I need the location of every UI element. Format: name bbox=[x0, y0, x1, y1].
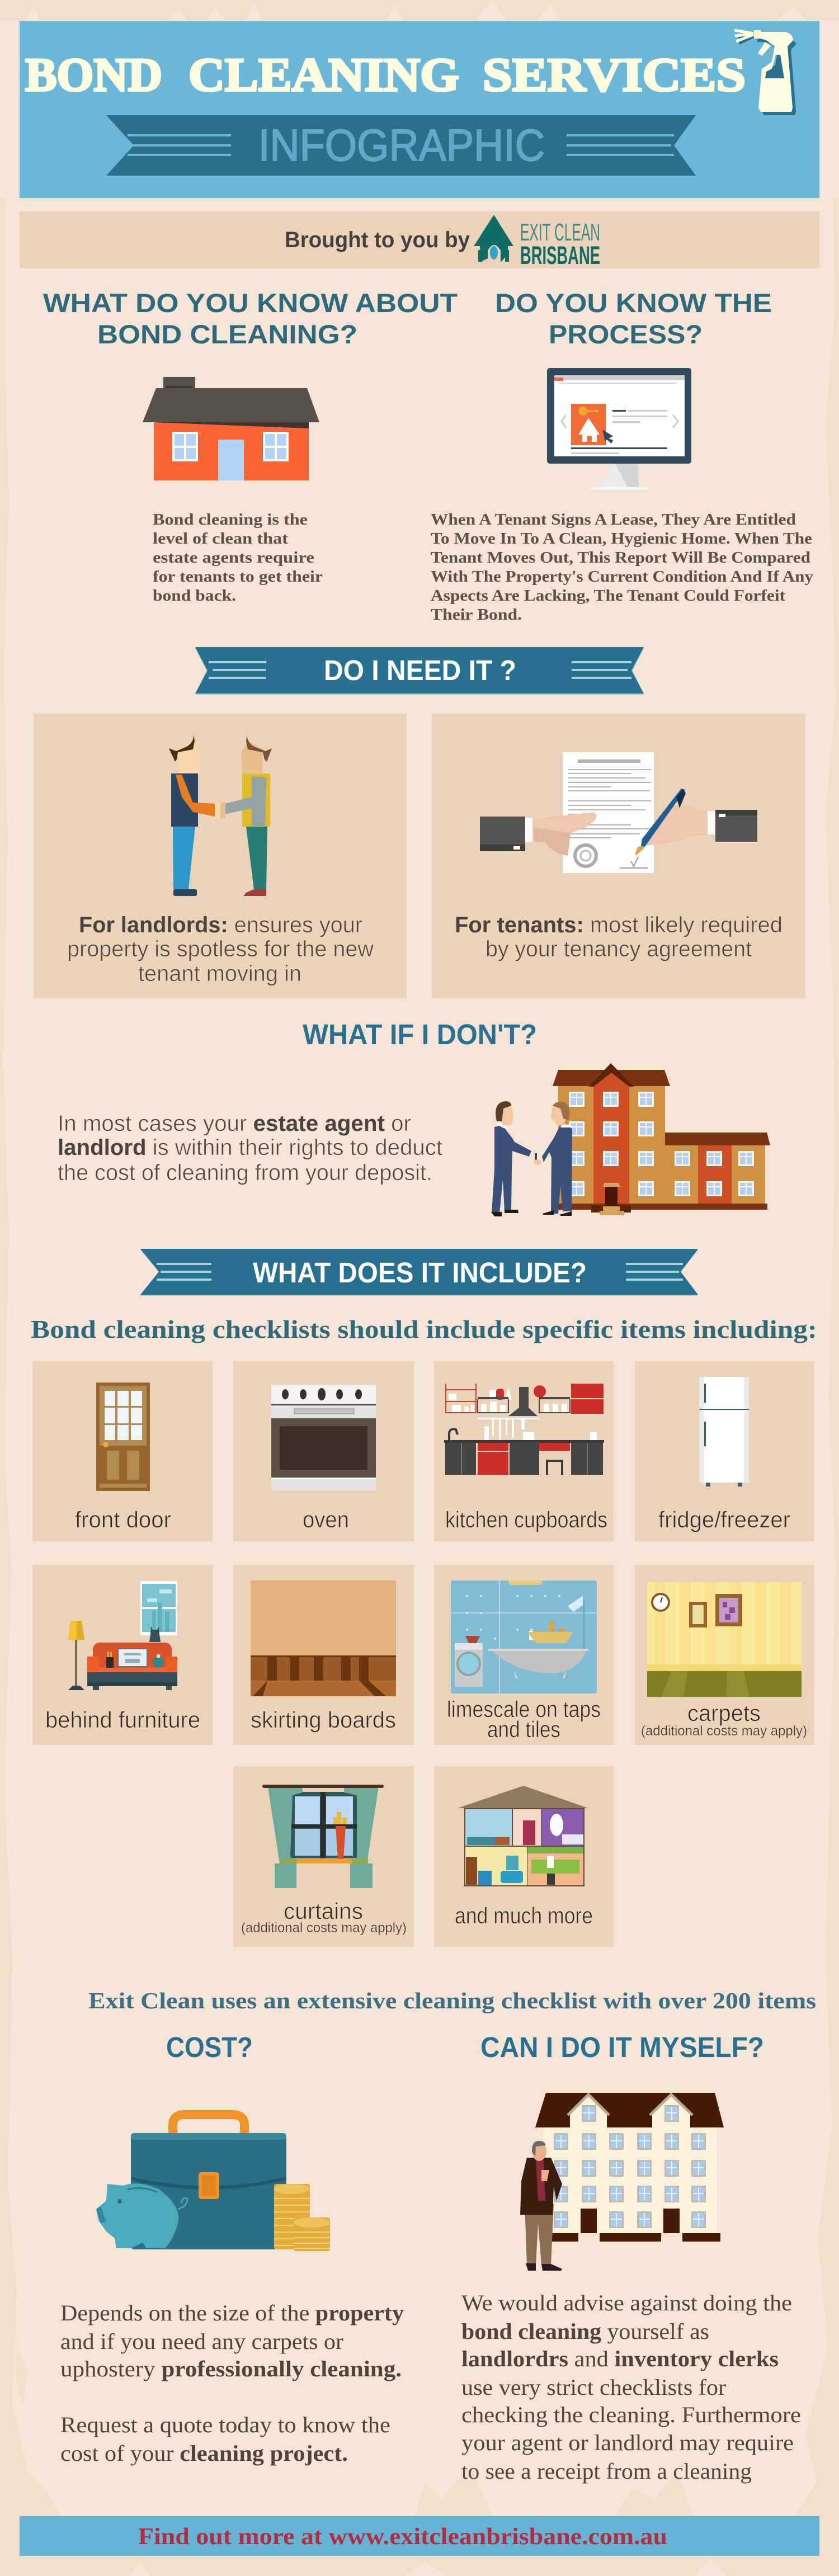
label: carpets: carpets bbox=[687, 1700, 761, 1726]
text: what if i don't body: In most cases your estate agent or bbox=[58, 1111, 411, 1136]
card: behind furniture bbox=[32, 1565, 213, 1745]
text: exit clean checklist note: Exit Clean uses an extensive cleaning checklist with over 200 items bbox=[88, 1988, 816, 2013]
ribbon: what does it include bbox=[140, 1249, 698, 1296]
text: can i do it myself description: checking the cleaning. Furthermore bbox=[461, 2402, 801, 2427]
text: bond cleaning definition: estate agents require bbox=[153, 549, 314, 567]
icon: window with curtains bbox=[262, 1785, 384, 1888]
text: what if i don't body: the cost of cleaning from your deposit. bbox=[58, 1160, 432, 1185]
text: can i do it myself description: use very strict checklists for bbox=[461, 2375, 726, 2400]
card: limescale bbox=[434, 1565, 614, 1745]
icon: exit clean brisbane logo: BRISBANE bbox=[520, 241, 600, 270]
text: process description: To Move In To A Clean, Hygienic Home. When The bbox=[431, 530, 812, 548]
text: process description: Aspects Are Lacking, The Tenant Could Forfeit bbox=[431, 587, 785, 605]
text: for landlords bbox=[67, 913, 374, 986]
panel: for landlords bbox=[34, 714, 407, 998]
heading: cost: COST? bbox=[166, 2031, 253, 2063]
icon: apartment building with two agents bbox=[491, 1063, 770, 1216]
title: bond cleaning services: SERVICES bbox=[483, 49, 746, 101]
text: process description bbox=[431, 511, 814, 624]
icon: house cross-section bbox=[458, 1786, 588, 1886]
label: kitchen cupboards: kitchen cupboards bbox=[445, 1507, 607, 1532]
text: bond cleaning definition: bond back. bbox=[153, 587, 236, 605]
label: fridge/freezer: fridge/freezer bbox=[658, 1507, 790, 1532]
heading: do you know the process bbox=[495, 288, 772, 349]
label: behind furniture: behind furniture bbox=[45, 1707, 200, 1733]
title: bond cleaning services: CLEANING bbox=[188, 49, 459, 101]
label: skirting boards: skirting boards bbox=[251, 1707, 396, 1733]
panel: do you know the process bbox=[431, 288, 814, 624]
card: kitchen cupboards bbox=[434, 1361, 614, 1541]
ribbon: infographic: INFOGRAPHIC bbox=[258, 120, 545, 170]
text: cost description: Request a quote today to know the bbox=[60, 2412, 390, 2437]
label: and much more: and much more bbox=[455, 1903, 593, 1928]
icon: two people shaking hands bbox=[169, 730, 272, 896]
card: and much more bbox=[434, 1766, 614, 1947]
icon: man in front of building bbox=[520, 2093, 724, 2271]
text: cost description: and if you need any carpets or bbox=[60, 2329, 343, 2354]
text: can i do it myself description: landlordrs and inventory clerks bbox=[461, 2346, 779, 2371]
text: for tenants: For tenants: most likely required bbox=[455, 913, 783, 937]
ribbon: what does it include: WHAT DOES IT INCLUDE? bbox=[253, 1257, 587, 1289]
label: curtains bbox=[241, 1898, 407, 1936]
text: for tenants bbox=[455, 913, 783, 961]
sponsor text: Brought to you by bbox=[285, 228, 470, 252]
brought-to-you-by band bbox=[20, 211, 819, 270]
label: curtains: (additional costs may apply) bbox=[241, 1920, 407, 1936]
panel: what do you know bbox=[43, 288, 458, 605]
card: oven bbox=[233, 1361, 414, 1541]
heading: what do you know about bond cleaning bbox=[43, 288, 458, 349]
icon: signing contract bbox=[480, 752, 757, 873]
card: carpets bbox=[635, 1565, 814, 1745]
text: can i do it myself description: to see a receipt from a cleaning bbox=[461, 2459, 752, 2484]
panel: can i do it myself bbox=[461, 2031, 801, 2484]
card: skirting boards bbox=[233, 1565, 414, 1745]
icon: briefcase, piggy bank and coins bbox=[96, 2115, 330, 2251]
text: can i do it myself description bbox=[461, 2290, 801, 2484]
label: limescale on taps and tiles bbox=[447, 1696, 601, 1742]
icon: wall and skirting board bbox=[251, 1580, 396, 1696]
icon: spray bottle bbox=[734, 30, 796, 115]
heading: what if i don't: WHAT IF I DON'T? bbox=[303, 1018, 537, 1050]
text: bond cleaning definition: level of clean that bbox=[153, 530, 288, 548]
text: what if i don't body bbox=[58, 1111, 442, 1185]
icon: exit clean brisbane logo bbox=[474, 215, 600, 270]
label: oven: oven bbox=[303, 1507, 349, 1532]
ribbon: infographic bbox=[106, 115, 696, 176]
footer band bbox=[20, 2516, 819, 2556]
text: what if i don't body: landlord is within their rights to deduct bbox=[58, 1135, 442, 1160]
text: bond cleaning definition: Bond cleaning is the bbox=[153, 511, 308, 529]
icon: fridge bbox=[699, 1377, 749, 1487]
heading: do you know the process: PROCESS? bbox=[549, 319, 703, 349]
icon: kitchen bbox=[444, 1384, 604, 1475]
heading: do you know the process: DO YOU KNOW THE bbox=[495, 288, 772, 318]
text: cost description: cost of your cleaning project. bbox=[60, 2441, 348, 2466]
text: can i do it myself description: bond cleaning yourself as bbox=[461, 2319, 709, 2344]
label: front door: front door bbox=[75, 1507, 171, 1532]
text: for landlords: property is spotless for the new bbox=[67, 937, 374, 961]
icon: oven bbox=[271, 1385, 376, 1490]
text: process description: Their Bond. bbox=[431, 606, 522, 624]
heading: checklist intro: Bond cleaning checklists should include specific items including: bbox=[31, 1315, 817, 1343]
heading: can i do it myself: CAN I DO IT MYSELF? bbox=[480, 2031, 764, 2063]
text: bond cleaning definition: for tenants to get their bbox=[153, 568, 323, 586]
ribbon: do i need it bbox=[195, 647, 644, 695]
text: process description: With The Property's Current Condition And If Any bbox=[431, 568, 814, 586]
header banner bbox=[18, 20, 821, 199]
text: cost description: uphostery professionally cleaning. bbox=[60, 2356, 402, 2381]
label: carpets: (additional costs may apply) bbox=[641, 1723, 807, 1739]
icon: red house bbox=[143, 377, 319, 480]
icon: room with carpet bbox=[647, 1582, 802, 1697]
icon: bathroom bbox=[451, 1580, 597, 1693]
text: can i do it myself description: We would advise against doing the bbox=[461, 2290, 792, 2315]
text: for landlords: tenant moving in bbox=[138, 961, 301, 986]
title: bond cleaning services: BOND bbox=[25, 49, 162, 101]
label: limescale on taps and tiles: and tiles bbox=[487, 1716, 560, 1742]
text: cost description bbox=[60, 2300, 404, 2466]
label: curtains: curtains bbox=[284, 1898, 363, 1924]
panel: for tenants bbox=[432, 714, 805, 998]
text: process description: Tenant Moves Out, This Report Will Be Compared bbox=[431, 549, 810, 567]
text: cost description: Depends on the size of the property bbox=[60, 2300, 404, 2325]
text: can i do it myself description: your agent or landlord may require bbox=[461, 2430, 794, 2455]
card: fridge/freezer bbox=[635, 1361, 814, 1541]
icon: sofa with lamp and window bbox=[68, 1581, 177, 1690]
ribbon: do i need it: DO I NEED IT ? bbox=[324, 654, 516, 686]
icon: door bbox=[96, 1383, 150, 1491]
icon: computer monitor bbox=[547, 368, 691, 490]
text: for tenants: by your tenancy agreement bbox=[486, 937, 752, 961]
text: for landlords: For landlords: ensures your bbox=[79, 913, 362, 937]
footer link text: Find out more at www.exitcleanbrisbane.com.au bbox=[138, 2524, 667, 2550]
title: bond cleaning services bbox=[25, 49, 746, 101]
icon: exit clean brisbane logo: EXIT CLEAN bbox=[520, 219, 600, 246]
text: process description: When A Tenant Signs A Lease, They Are Entitled bbox=[431, 511, 796, 529]
label: limescale on taps and tiles: limescale on taps bbox=[447, 1696, 601, 1722]
panel: cost bbox=[60, 2031, 404, 2466]
text: bond cleaning definition bbox=[153, 511, 323, 605]
heading: what do you know about bond cleaning: WHAT DO YOU KNOW ABOUT bbox=[43, 288, 458, 318]
card: curtains bbox=[233, 1766, 414, 1947]
card: front door bbox=[32, 1361, 213, 1541]
heading: what do you know about bond cleaning: BOND CLEANING? bbox=[97, 319, 357, 349]
label: carpets bbox=[641, 1700, 807, 1739]
